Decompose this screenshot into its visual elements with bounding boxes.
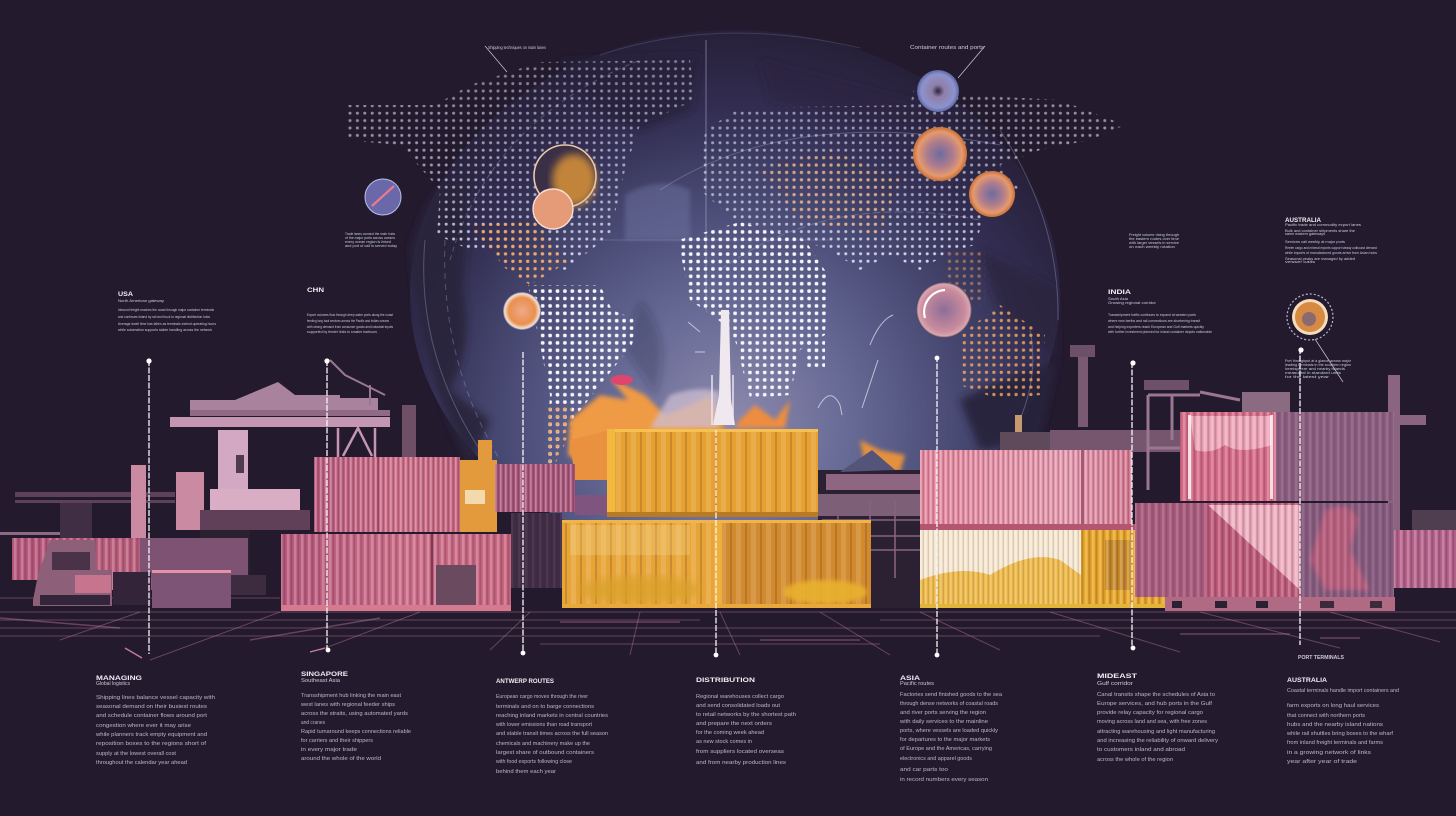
column 4: and prepare the next orders <box>696 721 772 727</box>
callout: orb note: leading terminals in the southern region <box>1285 363 1351 367</box>
column 4: to retail networks by the shortest path <box>696 712 796 718</box>
callout: Australia: Bulk and container shipments share the <box>1285 229 1355 233</box>
callout: USA: North American gateway <box>118 299 164 303</box>
column 7: Coastal terminals handle import containers and <box>1287 688 1399 694</box>
column 2: in every major trade <box>301 747 357 753</box>
white scribble marks <box>688 315 893 415</box>
pin 5 <box>935 356 939 657</box>
column 3: largest share of outbound containers <box>496 750 594 756</box>
column 2: Rapid turnaround keeps connections reliable <box>301 729 411 735</box>
orange highlighted dots <box>470 150 1045 470</box>
orb: lone outer ring <box>1287 294 1343 382</box>
centre background plant <box>818 450 920 610</box>
callout: USA: while automation supports stable handling across the network <box>118 328 212 332</box>
column 1: while planners track empty equipment and <box>95 732 207 738</box>
stack: far left pink and truck <box>12 538 266 608</box>
callout: China: with strong demand from consumer goods and industrial inputs <box>307 325 393 329</box>
globe arcs <box>424 33 1058 460</box>
column 5: and river ports serving the region <box>900 710 986 716</box>
callout: Australia: vessel calls <box>1285 260 1315 264</box>
pin 3 <box>521 352 525 655</box>
annotation: top left: Shipping techniques on main lanes <box>488 45 547 50</box>
column 7: farm exports on long haul services <box>1287 703 1379 709</box>
annotation: left note: of the major ports across oceans <box>345 236 395 240</box>
pin 6 <box>1130 360 1136 650</box>
column 1: supply at the lowest overall cost <box>96 751 176 757</box>
column 6: across the whole of the region <box>1097 757 1173 763</box>
orb: large orange <box>534 145 596 207</box>
column 5: of Europe and the Americas, carrying <box>900 746 992 752</box>
callout: India: INDIA <box>1108 289 1131 296</box>
bottom text columns <box>95 655 1399 783</box>
column 7: PORT TERMINALS <box>1298 655 1345 661</box>
stack: left pink <box>281 457 511 611</box>
column 3: and stable transit times across the full season <box>496 731 608 737</box>
column 2: Southeast Asia <box>301 678 340 684</box>
column 3: chemicals and machinery make up the <box>496 741 590 747</box>
callout: India: South Asia <box>1108 297 1128 301</box>
annotation: top right: Container routes and ports <box>910 45 985 51</box>
callout: Australia: Pacific trade and commodity export lanes <box>1285 223 1361 227</box>
column 4: and send consolidated loads out <box>696 703 780 709</box>
column 4: Regional warehouses collect cargo <box>696 694 784 700</box>
column 5: for departures to the major markets <box>900 737 990 743</box>
column 2: and cranes <box>301 720 325 726</box>
pin 2 <box>324 358 330 652</box>
orb: top right blue <box>917 70 959 112</box>
orb: lilac <box>916 282 972 338</box>
column 1: Shipping lines balance vessel capacity with <box>96 695 215 701</box>
callout: Australia: while imports of manufactured goods arrive from Asian hubs <box>1285 251 1377 255</box>
upper text callouts <box>118 217 1377 379</box>
ground <box>0 598 1456 816</box>
callout: China: Export volumes flow through deep water ports along the coast <box>307 313 393 317</box>
amber container <box>1081 530 1165 608</box>
lower diagonal side <box>1206 503 1300 597</box>
orb: South America <box>503 292 541 330</box>
annotation: left note: and port of call is served today <box>345 244 397 248</box>
callout: Australia: Seasonal peaks are managed by added <box>1285 257 1355 261</box>
column 5 <box>899 675 1003 783</box>
column 5: with daily services to the mainline <box>899 719 988 725</box>
column 5: Factories send finished goods to the sea <box>900 692 1003 698</box>
stack: far right pink <box>1394 530 1456 588</box>
callout: China: supported by feeder links to smaller harbours <box>307 330 377 334</box>
ground perspective lines <box>0 598 1456 660</box>
callout: China: CHN <box>307 287 324 294</box>
top yellow container <box>607 429 818 517</box>
annotation: centre-right note: with larger vessels in service <box>1129 241 1179 245</box>
annotation: left note: every ocean region is linked <box>345 240 391 244</box>
red marker <box>611 375 633 385</box>
column 1: throughout the calendar year ahead <box>96 760 187 766</box>
column 7: while rail shuttles bring boxes to the wharf <box>1286 731 1393 737</box>
callout: orb note: hemisphere and nearby islands <box>1285 367 1345 371</box>
pin 4 <box>714 430 718 657</box>
callout: USA <box>118 291 216 332</box>
annotation: centre-right note: the eastern routes over time <box>1129 237 1179 241</box>
callout: Australia <box>1285 217 1377 264</box>
column 2: across the straits, using automated yards <box>301 711 408 717</box>
column 7: in a growing network of links <box>1287 750 1371 756</box>
column 2: SINGAPORE <box>301 671 349 678</box>
column 7 <box>1286 655 1399 765</box>
left dim crane <box>0 492 175 538</box>
callout: India: with further investment planned for inland container depots nationwide <box>1108 330 1212 334</box>
callout: USA: Average dwell time has fallen as terminals extend operating hours <box>118 322 216 326</box>
callout: orb note <box>1285 359 1352 379</box>
lower dark side <box>1300 503 1394 597</box>
column 7: AUSTRALIA <box>1287 677 1327 684</box>
callout: USA: USA <box>118 291 133 298</box>
lower right yellow container <box>714 520 871 608</box>
callout: Australia: same eastern gateways <box>1285 232 1325 236</box>
callout: orb note: measured in standard units <box>1285 371 1341 375</box>
column 1: Global logistics <box>96 681 130 687</box>
callout: Australia: Reefer cargo and mineral exports support steady outbound demand <box>1285 246 1377 250</box>
upper dark side <box>1276 412 1394 501</box>
column 4: as new stock comes in <box>696 739 752 745</box>
column 3: with lower emissions than road transport <box>495 722 592 728</box>
column 5: through dense networks of coastal roads <box>900 701 998 707</box>
column 6: Gulf corridor <box>1097 681 1133 687</box>
map leader lines <box>485 46 985 78</box>
column 3: reaching inland markets in central countries <box>496 713 608 719</box>
callout: China <box>307 287 393 334</box>
column 1: seasonal demand on their busiest routes <box>96 704 207 710</box>
stack: central yellow <box>562 429 871 608</box>
globe sphere <box>410 30 1060 560</box>
column 2: Transshipment hub linking the main east <box>301 693 401 699</box>
stack: right pink <box>1135 412 1395 611</box>
orb: pink small <box>533 189 573 229</box>
main gantry crane <box>170 360 416 580</box>
map annotations <box>345 45 1179 249</box>
column 2: west lanes with regional feeder ships <box>300 702 395 708</box>
upper light side <box>1180 412 1276 501</box>
column 7: that connect with northern ports <box>1287 713 1365 719</box>
orb: orange-pink <box>913 127 967 181</box>
column 6: Canal transits shape the schedules of Asia to <box>1097 692 1215 698</box>
column 4 <box>696 677 796 766</box>
column 3 <box>495 678 608 775</box>
column 1: and schedule container flows around port <box>96 713 207 719</box>
column 7: year after year of trade <box>1287 759 1357 765</box>
callout: USA: and continues inland by rail and truck to regional distribution hubs <box>118 315 210 319</box>
column 4: DISTRIBUTION <box>696 677 755 684</box>
callout: orb note: Port throughput at a glance across major <box>1285 359 1352 363</box>
column 3: behind them each year <box>496 769 556 775</box>
left towers <box>131 465 204 540</box>
bright southern dots <box>528 222 828 470</box>
column 7: from inland freight terminals and farms <box>1287 740 1383 746</box>
annotation: left note <box>345 232 397 248</box>
column 6 <box>1097 673 1218 763</box>
pale container <box>920 530 1081 608</box>
stack: back pink and dark <box>460 440 607 588</box>
column 6: and increasing the reliability of onward delivery <box>1097 738 1218 744</box>
callout: India: where new berths and rail connections are shortening transit <box>1108 319 1200 323</box>
container stacks <box>12 412 1456 611</box>
callout: India: and helping exporters reach European and Gulf markets quickly <box>1108 325 1204 329</box>
orb: far left <box>365 179 401 215</box>
pale land patch <box>625 184 690 240</box>
column 2 <box>300 671 411 762</box>
pin 7 <box>1298 347 1304 645</box>
dark oceans on the globe <box>410 55 1058 470</box>
callout: Australia: Services call weekly at major ports <box>1285 240 1345 244</box>
port skyline: cranes <box>0 345 1456 610</box>
truck <box>33 540 112 606</box>
annotation: centre-right note: on each weekly rotation <box>1129 245 1175 249</box>
right stubs <box>1000 415 1050 450</box>
column 7: hubs and the nearby island nations <box>1287 722 1383 728</box>
pin 1 <box>146 358 152 654</box>
lower left yellow container <box>562 520 714 608</box>
column 3: terminals and on to barge connections <box>496 704 594 710</box>
column 4: from suppliers located overseas <box>696 749 784 755</box>
vertical pin lines <box>146 347 1304 657</box>
callout: India: Growing regional corridor <box>1108 301 1157 305</box>
column 1: MANAGING <box>96 675 142 682</box>
column 3: with food exports following close <box>495 759 572 765</box>
column 1: congestion where ever it may arise <box>96 723 191 729</box>
column 4: for the coming week ahead <box>696 730 764 736</box>
column 6: Europe services, and hub ports in the Gulf <box>1097 701 1212 707</box>
column 1: reposition boxes to the regions short of <box>96 741 206 747</box>
column 6: moving across land and sea, with free zones <box>1097 719 1207 725</box>
callout: India <box>1108 289 1212 334</box>
pedestals <box>1165 597 1395 611</box>
annotation: centre-right note <box>1129 233 1179 249</box>
orb: east <box>969 171 1015 217</box>
column 3: European cargo moves through the river <box>496 694 588 700</box>
right plant structures <box>1050 345 1456 535</box>
callout: USA: Inbound freight reaches the coast through major container terminals <box>118 308 214 312</box>
stray ground ticks <box>125 648 325 658</box>
annotation: centre-right note: Freight volume rising through <box>1129 233 1179 237</box>
callout: orb note: for the latest year <box>1285 375 1330 379</box>
column 6: attracting warehousing and light manufacturing <box>1097 729 1215 735</box>
column 5: ports, where vessels are loaded quickly <box>900 728 998 734</box>
column 5: ASIA <box>900 675 920 682</box>
column 6: provide relay capacity for regional cargo <box>1097 710 1203 716</box>
stack: right-centre pink and pale yellow <box>920 450 1165 608</box>
column 3: ANTWERP ROUTES <box>496 678 555 685</box>
dotted continents <box>345 60 1125 270</box>
column 2: around the whole of the world <box>301 756 381 762</box>
column 6: MIDEAST <box>1097 673 1137 680</box>
column 5: Pacific routes <box>900 681 935 687</box>
callout: India: Transshipment traffic continues to expand at western ports <box>1108 313 1196 317</box>
callout: China: feeding long haul services across the Pacific and Indian oceans <box>307 319 389 323</box>
column 2: for carriers and their shippers <box>301 738 373 744</box>
column 6: to customers inland and abroad <box>1097 747 1185 753</box>
map orbs <box>365 70 1343 382</box>
globe with dotted world map <box>345 30 1125 560</box>
annotation: left note: Trade lanes connect the main hubs <box>345 232 395 236</box>
column 5: electronics and apparel goods <box>900 756 972 762</box>
column 5: and car parts too <box>900 767 948 773</box>
lower left side <box>1135 503 1206 597</box>
column 1 <box>95 675 215 766</box>
orange splash behind containers <box>568 310 905 480</box>
column 5: in record numbers every season <box>900 777 988 783</box>
rocket-like tower <box>712 310 735 425</box>
callout: Australia: AUSTRALIA <box>1285 217 1321 224</box>
column 4: and from nearby production lines <box>696 760 786 766</box>
